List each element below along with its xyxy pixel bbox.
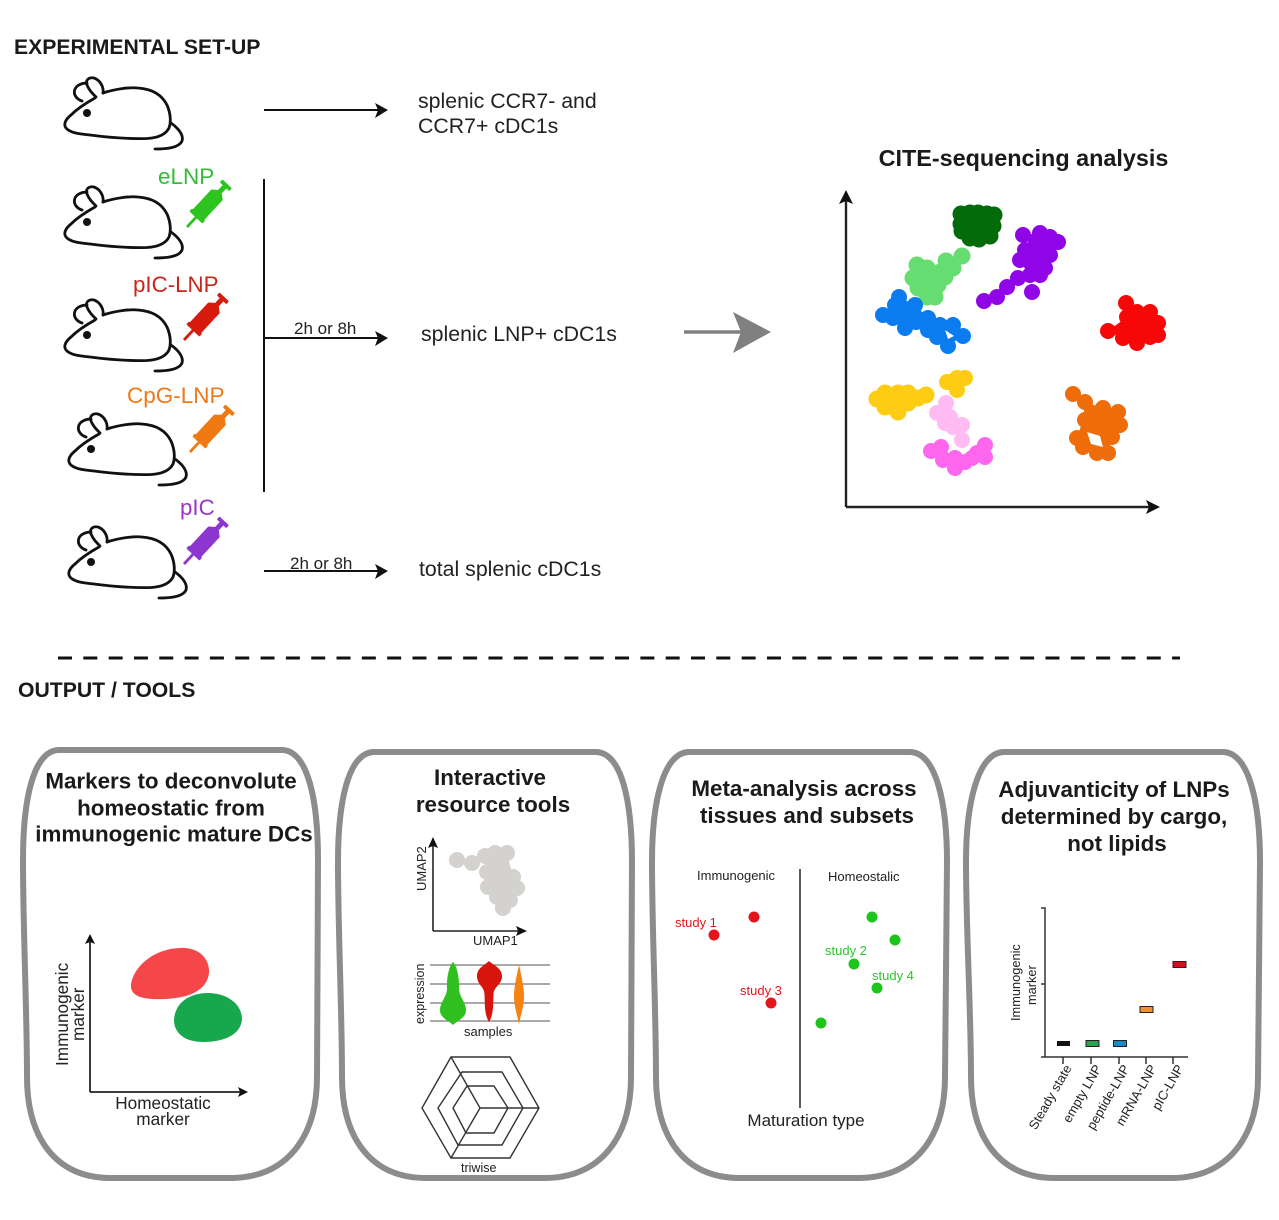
heading: output / tools: OUTPUT / TOOLS [18,679,195,702]
chart: CITE-seq clusters [839,190,1160,514]
chart: maturation type dots: study 2 [825,943,867,958]
arrow: pIC to total cDC1s: 2h or 8h [290,554,352,573]
chart: UMAP: UMAP2 [414,846,429,891]
chart: marker scatter [52,934,248,1129]
heading: CITE-sequencing analysis: CITE-sequencing analysis [879,145,1168,171]
panel heading: adjuvanticity: not lipids [1067,831,1167,856]
chart: maturation type dots: study 3 [740,983,782,998]
group: pIC-LNP mouse: pIC-LNP [133,272,218,297]
divider [58,656,1180,660]
group: CpG-LNP mouse: CpG-LNP [127,383,225,408]
chart: immunogenic marker per cargo: Immunogenic [1008,944,1023,1021]
heading: experimental set-up: EXPERIMENTAL SET-UP [14,36,260,59]
panel: markers [23,750,318,1178]
panel heading: meta-analysis: Meta-analysis across [691,776,917,801]
group: eLNP mouse: eLNP [158,164,214,189]
chart: immunogenic marker per cargo: mRNA-LNP [1113,1062,1160,1128]
arrow: pIC to total cDC1s [264,554,388,579]
chart: immunogenic marker per cargo: marker [1024,964,1039,1005]
panel heading: markers: homeostatic from [77,796,265,820]
panel: interactive tools [338,752,632,1178]
chart: UMAP [414,837,527,948]
group: pIC mouse [69,495,231,598]
group: pIC-LNP mouse [65,272,231,371]
group: CpG-LNP mouse [69,383,237,485]
panel heading: interactive tools: Interactive [434,765,546,790]
panel heading: adjuvanticity: Adjuvanticity of LNPs [998,777,1230,802]
chart: marker scatter: marker [68,987,88,1041]
chart: triwise radar [422,1057,539,1175]
chart: maturation type dots: study 4 [872,968,914,983]
chart: triwise radar: triwise [461,1161,496,1175]
bracket arrow: LNP treatments to LNP+ cDC1s: 2h or 8h [294,319,356,338]
chart: immunogenic marker per cargo: pIC-LNP [1149,1062,1187,1113]
chart: violin plot: samples [464,1024,513,1039]
text: splenic LNP+ cDC1s: splenic LNP+ cDC1s [421,322,617,346]
chart: immunogenic marker per cargo: peptide-LNP [1083,1062,1133,1132]
arrow: untreated to CCR7 cDC1s [264,103,388,118]
arrow: to CITE-sequencing [684,312,771,353]
text: splenic CCR7- and CCR7+ cDC1s: splenic CCR7- and [418,89,597,113]
chart: violin plot [413,961,550,1039]
text: splenic CCR7- and CCR7+ cDC1s: CCR7+ cDC1s [418,114,558,138]
chart: immunogenic marker per cargo [1008,908,1188,1132]
chart: UMAP: UMAP1 [473,933,518,948]
panel heading: meta-analysis [691,776,917,828]
text: splenic CCR7- and CCR7+ cDC1s [418,89,597,138]
panel heading: adjuvanticity [998,777,1230,856]
chart: immunogenic marker per cargo: empty LNP [1059,1062,1105,1125]
chart: immunogenic marker per cargo: Steady state [1025,1062,1075,1132]
panel: adjuvanticity [966,752,1260,1178]
panel heading: markers [35,768,313,846]
chart: violin plot: expression [413,964,427,1024]
panel: meta-analysis [652,752,947,1178]
text: total splenic cDC1s: total splenic cDC1s [419,557,601,581]
panel heading: markers: immunogenic mature DCs [35,822,313,846]
icon: untreated mouse [65,78,182,149]
group: pIC mouse: pIC [180,495,215,520]
group: eLNP mouse [65,164,234,258]
chart: maturation type dots [675,868,914,1130]
bracket arrow: LNP treatments to LNP+ cDC1s [264,179,388,492]
chart: marker scatter: marker [136,1109,190,1129]
panel heading: markers: Markers to deconvolute [45,768,297,794]
chart: maturation type dots: Immunogenic [697,868,776,883]
panel heading: interactive tools [416,765,570,817]
panel heading: meta-analysis: tissues and subsets [700,803,914,828]
chart: marker scatter: Homeostatic [115,1093,211,1113]
chart: marker scatter: Immunogenic [52,962,72,1066]
chart: maturation type dots: study 1 [675,915,717,930]
chart: maturation type dots: Maturation type [747,1111,865,1130]
panel heading: adjuvanticity: determined by cargo, [1001,804,1227,829]
panel heading: interactive tools: resource tools [416,792,570,817]
chart: maturation type dots: Homeostalic [828,869,900,884]
